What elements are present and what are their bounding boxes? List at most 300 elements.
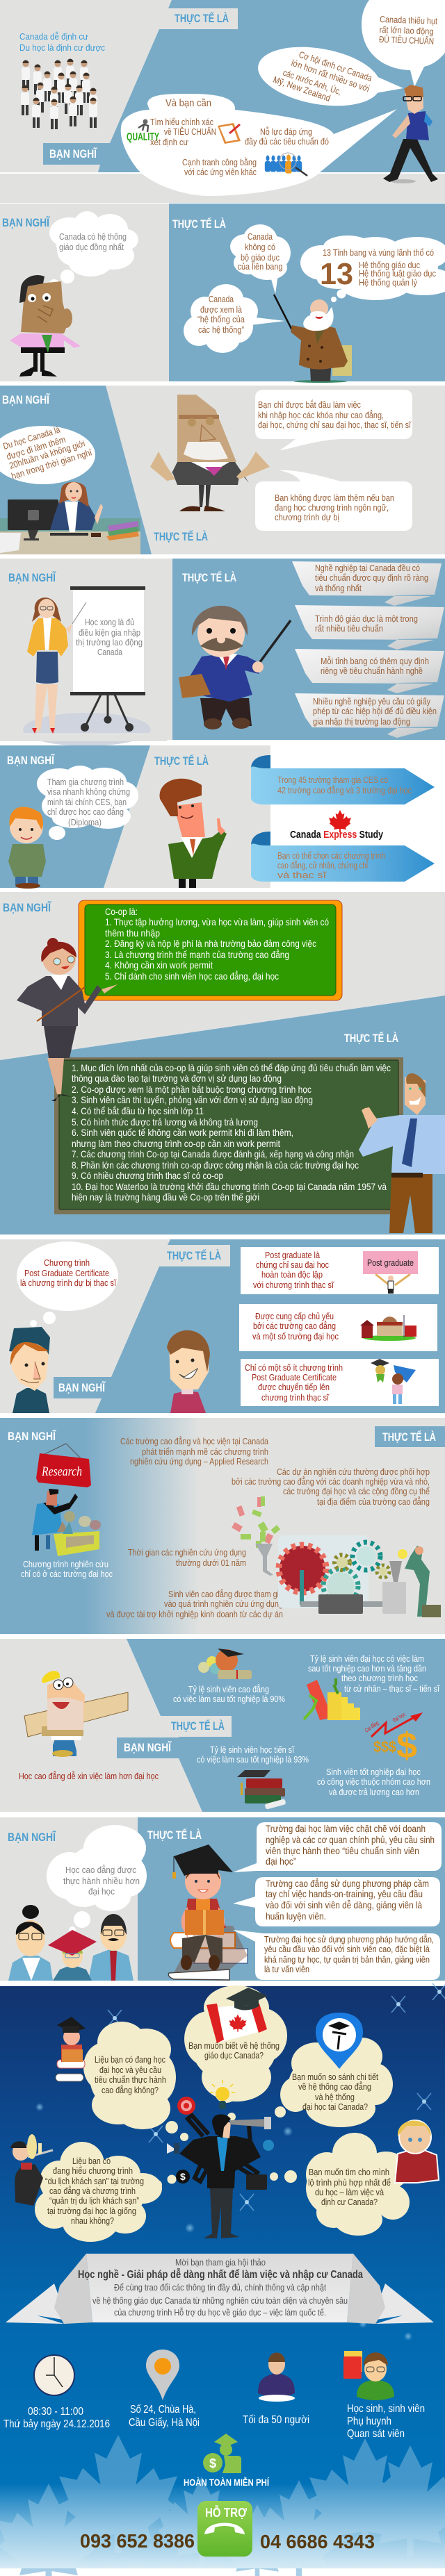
text: thời gian nghiên cứu: thường dưới 01 năm [176, 1558, 246, 1568]
illustration: professor with pointer [274, 295, 352, 383]
heading: bạn nghĩ: BẠN NGHĨ [2, 393, 50, 406]
heading: bạn nghĩ: BẠN NGHĨ [58, 1380, 106, 1394]
thought cloud: CES: (Diploma) [68, 817, 102, 827]
icon: student with books [343, 2351, 394, 2400]
green board: co-op là: 4. Không cần xin work permit [105, 959, 213, 971]
text: đại học tăng dần: Tỷ lệ sinh viên đại học có việc làm [310, 1653, 424, 1664]
heading: thực tế là: THỰC TẾ LÀ [147, 1828, 202, 1842]
box: chuyển tiếp thạc sĩ [241, 1359, 439, 1406]
ribbon: 45 trường CES: Trong 45 trường tham gia CES có [277, 775, 388, 785]
text: tìm hiểu tiêu chuẩn: xét định cư [150, 137, 188, 147]
speech bubble: phương pháp hướng dẫn: là tư vấn viên [264, 1964, 309, 1974]
heading: bạn nghĩ: BẠN NGHĨ [8, 570, 56, 584]
icon: light bulb [210, 2080, 235, 2109]
icon: student on books [56, 2017, 86, 2081]
text: dự án phối hợp [232, 1467, 430, 1507]
icon: rising arrow and dollars: Đại học [392, 1711, 406, 1724]
text: và bạn cần: Và bạn cần [165, 97, 211, 109]
text: tiến sĩ 93%: có việc làm sau tốt nghiệp là 93% [197, 1754, 309, 1765]
text: hotline [80, 2530, 375, 2552]
box: post graduate độc lập [241, 1247, 439, 1294]
box: chuyển tiếp thạc sĩ: Chỉ có một số ít chương trình [245, 1362, 343, 1373]
speech bubble: không có bộ giáo dục: Canada [248, 231, 273, 242]
panel: section 4 gia nhập thị trường lao động [0, 559, 445, 746]
banner: hội thảo [6, 2254, 434, 2324]
text: cao đẳng 90%: có việc làm sau tốt nghiệp là 90% [173, 1694, 285, 1704]
box: post graduate độc lập: với chương trình thạc sĩ [253, 1280, 334, 1290]
ribbon: 45 trường CES [251, 755, 435, 804]
text: tiến sĩ 93% [197, 1744, 309, 1765]
speech bubble: cơ hội định cư: các nước Anh, Úc, [282, 67, 343, 97]
heading: bạn nghĩ: BẠN NGHĨ [7, 753, 55, 767]
ribbon: mỗi tỉnh bang: Mỗi tỉnh bang có thêm quy định [321, 656, 429, 666]
heading: thực tế là: THỰC TẾ LÀ [154, 530, 208, 543]
speech bubble: bắt đầu làm việc: đại học, chứng chỉ sau đại học, thạc sĩ, tiến sĩ [258, 420, 412, 430]
icon: MBA graduate [371, 1359, 416, 1404]
flipchart with text: Canada [97, 647, 123, 657]
box: cao đẳng cung cấp: bởi các trường cao đẳng [253, 1321, 336, 1331]
heading: bạn nghĩ [117, 1737, 179, 1758]
flipchart with text [70, 586, 145, 732]
icon: research sign: Research [41, 1464, 82, 1479]
speech bubble: không được làm thêm: chương trình dự bị [275, 512, 339, 522]
text: cạnh tranh công bằng: với các ứng viên khác [184, 167, 257, 177]
text: tiến sĩ 93%: Tỷ lệ sinh viên học tiến sĩ [210, 1744, 295, 1755]
illustration: professor in navy jacket [179, 606, 291, 729]
thought cloud: đang học đại học: Liệu bạn có đang học [95, 2054, 165, 2065]
box: cao đẳng cung cấp [239, 1304, 437, 1351]
icon: free tuition: $ [209, 2457, 216, 2470]
thought cloud: 13 tỉnh bang: 13 [320, 257, 353, 291]
speech bubble: du học được đi làm thêm: được đi làm thêm [5, 434, 67, 462]
icon: post graduate sign: Post graduate [367, 1257, 414, 1268]
dark board: thực tế co-op: 5. Có hình thức được trả lương và không trả lương [72, 1116, 258, 1128]
icon: free tuition [203, 2434, 241, 2473]
text: mô tả hội thảo: của chương trình Hỗ trợ du học về giáo dục – việc làm quốc tế. [114, 2307, 326, 2318]
thought cloud: post graduate [17, 1241, 118, 1327]
text: đối tượng: Học sinh, sinh viên [347, 2403, 425, 2415]
box: chuyển tiếp thạc sĩ: được chuyển tiếp lên [258, 1382, 330, 1392]
speech bubble: du học được đi làm thêm [0, 424, 95, 484]
thought cloud: hệ thống giáo dục canada [184, 1985, 287, 2103]
illustration: shrugging man in suit [150, 395, 270, 511]
dark board: thực tế co-op: 10. Đại học Waterloo là trường khởi đầu chương trình Co-op tại Canada năm 1957 và [72, 1181, 387, 1192]
dark board: thực tế co-op: 7. Các chương trình Co-op tại Canada được đánh giá, xếp hạng và công nhận [72, 1148, 354, 1159]
logo: Canada Express Study: Canada Express Study [290, 829, 384, 841]
speech bubble: hệ thống của các hệ thống [184, 284, 285, 353]
ribbon: giấy phép hiệp hội [295, 693, 444, 738]
text: cao đẳng dễ xin việc: Học cao đẳng dễ xin việc làm hơn đại học [19, 1771, 159, 1781]
thought cloud: 13 tỉnh bang: Hệ thống giáo dục [359, 260, 420, 270]
thought cloud: post graduate: Post Graduate Certificate [24, 1268, 109, 1278]
illustration: thinking man [10, 275, 81, 377]
thought cloud: hệ thống giáo dục canada: giáo dục Canada? [204, 2050, 264, 2061]
text: applied research [120, 1436, 269, 1467]
thought cloud: đang học đại học: cao đẳng không? [102, 2085, 159, 2095]
speech bubble: hệ thống của các hệ thống: “hệ thống của [197, 314, 245, 324]
heading: thực tế là: THỰC TẾ LÀ [171, 1719, 225, 1733]
heading: bạn nghĩ: BẠN NGHĨ [3, 900, 51, 914]
thought cloud: 13 tỉnh bang [300, 236, 445, 302]
thought cloud: CES: visa nhanh không chứng [47, 786, 130, 797]
thought cloud: du lịch khách sạn: Liệu bạn có [72, 2156, 111, 2166]
panel: section 5 CES [0, 745, 445, 889]
thought cloud: so sánh cao đẳng đại học: đại học tại Canada? [302, 2102, 368, 2112]
flipchart with text: Học xong là đủ [85, 617, 134, 627]
flipchart with text: thị trường lao động [76, 637, 143, 647]
speech bubble: không được làm thêm [255, 470, 412, 531]
icon: graduation balls [198, 1649, 252, 1679]
green board: co-op là: 5. Chỉ dành cho sinh viên học cao đẳng, đại học [105, 970, 279, 982]
panel: section 9 việc làm [0, 1639, 445, 1812]
ribbon: nghề nghiệp có tiêu chuẩn: và thống nhất [315, 583, 362, 593]
text: lương cao hơn: và được trả lương cao hơn [329, 1787, 419, 1797]
thought cloud: CES: Tham gia chương trình [47, 777, 124, 787]
box: cao đẳng cung cấp: và một số trường đại học [252, 1331, 339, 1341]
ribbon: chương trình: Bạn có thể chọn các chương trình [277, 850, 385, 861]
green board: co-op là: 2. Đăng ký và nộp lệ phí là nhà trường bảo đảm công việc [105, 938, 316, 949]
ribbon: mỗi tỉnh bang: riêng về tiêu chuẩn hành nghề [321, 666, 423, 676]
text: nỗ lực đáp ứng [245, 126, 329, 147]
speech bubble: và bạn cần [121, 94, 397, 196]
panel: section 7 post graduate [0, 1239, 445, 1413]
icon: walking man with glasses [383, 85, 438, 183]
heading: thực tế là: THỰC TẾ LÀ [167, 1249, 221, 1262]
dark board: thực tế co-op: 1. Mục đích lớn nhất của co-op là giúp sinh viên có thể đáp ứng đủ tiêu chuẩn làm việc [72, 1062, 391, 1073]
text: nghiên cứu chỉ ở đại học: chỉ có ở các trường đại học [21, 1569, 113, 1579]
thought cloud: CES: minh tài chính CES, bạn [47, 797, 127, 807]
thought cloud: đang học đại học: tiêu chuẩn thực hành [95, 2074, 166, 2085]
text: tìm hiểu tiêu chuẩn [150, 117, 216, 147]
icon: college [360, 1315, 416, 1341]
text: mô tả hội thảo [92, 2282, 348, 2318]
speech bubble: không được làm thêm: đang học chương trình ngôn ngữ, [275, 502, 389, 513]
icon: bar chart [304, 1678, 360, 1720]
icon: map pin graduate [316, 2013, 363, 2069]
text: mô tả hội thảo: Để cùng trao đổi các thông tin đầy đủ, chính thống và cập nhật [114, 2282, 326, 2293]
box: post graduate độc lập: Post graduate là [265, 1250, 321, 1260]
icon: canada flag and grad cap [207, 1988, 268, 2043]
thought cloud: du lịch khách sạn: đang hiểu chương trình [53, 2165, 133, 2176]
thought cloud: 13 tỉnh bang: Hệ thống quản lý [359, 277, 417, 288]
icon: stacked books [237, 1770, 286, 1810]
icon: rising arrow and dollars: $$$ [373, 1738, 396, 1756]
text: sinh viên tham gia: Sinh viên cao đẳng được tham gia [168, 1589, 284, 1599]
thought cloud: CES: chỉ được học cao đẳng [47, 807, 124, 817]
illustration: woman at desk [0, 482, 140, 554]
text: mời tham gia: Mời bạn tham gia hội thảo [175, 2257, 266, 2268]
thought cloud: so sánh cao đẳng đại học: Bạn muốn so sánh chi tiết [292, 2072, 378, 2082]
dark board: thực tế co-op: hiện nay là trường hàng đầu về Co-op trên thế giới [72, 1191, 259, 1203]
thought cloud: du lịch khách sạn: “du lịch khách sạn” tại trường [45, 2176, 144, 2186]
text: thời gian nghiên cứu: Thời gian các nghiên cứu ứng dụng [128, 1547, 246, 1558]
box: post graduate độc lập: chứng chỉ sau đại học [256, 1260, 329, 1270]
speech bubble: du học được đi làm thêm: 20h/tuần và không giới [8, 438, 86, 471]
text: Canada dễ định cư [19, 31, 105, 53]
button: hỗ trợ: HỖ TRỢ [205, 2505, 248, 2520]
panel: section 2 hệ thống giáo dục [0, 204, 445, 383]
box: chuyển tiếp thạc sĩ: Post Graduate Certificate [252, 1372, 337, 1382]
illustration: teacher with pointer [17, 938, 118, 1101]
speech bubble: cơ hội định cư: Mỹ, New Zealand [272, 74, 332, 104]
ribbon: nghề nghiệp có tiêu chuẩn [292, 561, 442, 606]
thought cloud: du lịch khách sạn: tại trường đại học là giống [47, 2206, 136, 2216]
speech bubble: không có bộ giáo dục: không có [245, 242, 275, 252]
speech bubble: thiếu hụt lao động [362, 0, 445, 87]
illustration: man in green suit [160, 779, 227, 888]
text: nỗ lực đáp ứng: đầy đủ các tiêu chuẩn đó [245, 136, 329, 147]
white panel with ribbons [251, 745, 445, 888]
thought cloud: lộ trình phù hợp: định cư Canada? [321, 2197, 378, 2207]
text: nghiên cứu chỉ ở đại học [21, 1559, 113, 1579]
text: thời gian: Thứ bảy ngày 24.12.2016 [3, 2418, 110, 2430]
panel: section 8 nghiên cứu [0, 1418, 445, 1634]
dark board: thực tế co-op: 8. Phần lớn các chương trình co-op được công nhận là của các trường đại học [72, 1159, 359, 1171]
thought cloud: đang học đại học [83, 2022, 195, 2150]
green board: co-op là: 1. Thực tập hưởng lương, vừa học vừa làm, giúp sinh viên có [105, 916, 329, 927]
ribbon: nghề nghiệp có tiêu chuẩn: Nghề nghiệp tại Canada đều có [315, 563, 420, 573]
illustration: builder with plank [24, 1671, 128, 1757]
thought cloud: so sánh cao đẳng đại học: về hệ thống cao đẳng [298, 2081, 371, 2092]
thought cloud: post graduate: là chương trình dự bị thạc sĩ [20, 1278, 117, 1288]
icon: quality [127, 119, 159, 143]
text: cạnh tranh công bằng: Cạnh tranh công bằng [182, 157, 257, 167]
dark board: thực tế co-op: 3. Sinh viên cần thi tuyển, phỏng vấn với đơn vị sử dụng lao động [72, 1094, 313, 1105]
icon: crowd of people [21, 58, 97, 129]
panel: section 3 đi làm thêm [0, 386, 445, 554]
illustration: multitasking businessman: $ [180, 2171, 186, 2182]
speech bubble: bắt đầu làm việc [255, 390, 412, 450]
thought cloud: du lịch khách sạn: nhau không? [71, 2215, 114, 2226]
heading: bạn nghĩ: BẠN NGHĨ [124, 1740, 172, 1754]
icon: rising arrow and dollars [364, 1711, 423, 1766]
speech bubble: du học được đi làm thêm: Du học Canada là [1, 424, 62, 452]
speech bubble: bắt đầu làm việc: Bạn chỉ được bắt đầu làm việc [258, 399, 361, 410]
illustration: man in light blue shirt [359, 1073, 445, 1233]
icon: clock [34, 2355, 74, 2395]
thought cloud: so sánh cao đẳng đại học [227, 2038, 393, 2127]
icon: checklist [218, 123, 241, 144]
thought cloud: lộ trình phù hợp: lộ trình phù hợp nhất để [308, 2177, 391, 2188]
text: hotline: 04 6686 4343 [260, 2531, 375, 2552]
thought cloud: thực hành nhiều hơn: Học cao đẳng được [65, 1865, 136, 1875]
thought cloud: đồng nhất: giáo dục đồng nhất [59, 242, 124, 252]
speech bubble: cơ hội định cư: lớn hơn rất nhiều so với [290, 58, 371, 94]
panel: section 6 co-op [0, 892, 445, 1235]
text: đối tượng [347, 2403, 425, 2440]
thought cloud: du lịch khách sạn [35, 2142, 177, 2242]
icon: people and magnifier [265, 153, 307, 176]
heading: bạn nghĩ: BẠN NGHĨ [2, 215, 50, 229]
ribbon: 45 trường CES: 42 trường cao đẳng và 3 trường đại học [277, 785, 412, 795]
text: miễn phí: HOÀN TOÀN MIỄN PHÍ [184, 2477, 270, 2488]
heading: thực tế là: THỰC TẾ LÀ [154, 754, 209, 768]
text: hotline: 093 652 8386 [80, 2530, 195, 2552]
text: thời gian: 08:30 - 11:00 [28, 2406, 83, 2418]
thought cloud: post graduate: Chương trình [44, 1257, 90, 1268]
thought cloud: thực hành nhiều hơn [47, 1825, 147, 1933]
button: hỗ trợ [197, 2501, 252, 2557]
text: thời gian nghiên cứu [128, 1547, 246, 1568]
heading: thực tế là: THỰC TẾ LÀ [344, 1032, 398, 1045]
heading: bạn nghĩ: BẠN NGHĨ [49, 147, 97, 160]
illustration: boy with cap [9, 1327, 50, 1413]
text: đại học tăng dần [308, 1653, 440, 1694]
text: địa điểm [129, 2404, 200, 2429]
text: lương cao hơn [317, 1767, 430, 1797]
speech bubble: đại học thực hành [233, 1822, 442, 1872]
heading: thực tế là: THỰC TẾ LÀ [172, 217, 226, 231]
box: cao đẳng cung cấp: Được cung cấp chủ yếu [255, 1311, 334, 1321]
speech bubble: cơ hội định cư: Cơ hội định cư Canada [298, 49, 374, 83]
thought cloud: lộ trình phù hợp: Bạn muốn tìm cho mình [309, 2167, 389, 2177]
dark board: thực tế co-op: 9. Có nhiều chương trình thạc sĩ có co-op [72, 1170, 223, 1181]
icon: post graduate sign [363, 1251, 418, 1294]
speech bubble: thiếu hụt lao động: rất lớn lao động [379, 24, 434, 37]
icon: rising arrow and dollars: $ [396, 1726, 417, 1766]
ribbon: chương trình: cao đẳng, cử nhân, chứng chỉ [277, 860, 368, 870]
ribbon: nghề nghiệp có tiêu chuẩn: tiêu chuẩn được quy định rõ ràng [315, 572, 428, 583]
icon: blond boy in red [395, 2120, 439, 2183]
text: đại học tăng dần: theo chương trình học [341, 1673, 418, 1683]
text: Canada dễ định cư: Canada dễ định cư [19, 31, 88, 42]
illustration: smiling man [167, 1330, 210, 1413]
text: applied research: nghiên cứu ứng dụng – Applied Research [130, 1456, 268, 1467]
text: số người: Tối đa 50 người [243, 2414, 309, 2426]
ribbon: chương trình: và thạc sĩ [277, 870, 327, 880]
text: cao đẳng 90% [173, 1684, 285, 1704]
text: applied research: Các trường cao đẳng và học viện tại Canada [120, 1436, 269, 1446]
heading: thực tế là [375, 1426, 445, 1447]
speech bubble: đại học thực hành: viên thực hành theo “tiêu chuẩn sinh viên [266, 1845, 419, 1856]
text: cao đẳng 90%: Tỷ lệ sinh viên cao đẳng [188, 1684, 269, 1694]
green board: co-op là [79, 900, 342, 1000]
green board: co-op là: thêm thu nhập [105, 927, 160, 939]
speech bubble: không được làm thêm: Bạn không được làm thêm nếu bạn [275, 493, 394, 503]
text: Canada dễ định cư: Du học là định cư được [19, 42, 105, 53]
heading: thực tế là [167, 1245, 230, 1266]
text: nỗ lực đáp ứng: Nỗ lực đáp ứng [260, 126, 312, 137]
text: sinh viên tham gia: và được tài trợ khởi nghiệp kinh doanh từ các dự án [106, 1609, 283, 1619]
text: sinh viên tham gia: vào quá trình nghiên cứu ứng dụng [164, 1599, 283, 1609]
speech bubble: hệ thống của các hệ thống: các hệ thống” [198, 324, 244, 335]
panel: section 10 thực hành [0, 1817, 445, 1981]
text: đối tượng: Phụ huynh [347, 2416, 391, 2427]
speech bubble: cơ hội định cư [253, 38, 403, 115]
dark board: thực tế co-op: thông qua đào tạo tại trường và đơn vị sử dụng lao động [72, 1073, 282, 1084]
thought cloud: thực hành nhiều hơn: đại học [88, 1886, 115, 1897]
box: chuyển tiếp thạc sĩ: chương trình thạc sĩ [261, 1392, 330, 1403]
thought cloud: du lịch khách sạn: cao đẳng và chương trình [49, 2186, 136, 2196]
icon: research sign [36, 1444, 91, 1487]
text: nghiên cứu chỉ ở đại học: Chương trình nghiên cứu [23, 1559, 108, 1569]
speech bubble: đại học thực hành: đại học” [266, 1856, 296, 1867]
text: đối tượng: Quan sát viên [347, 2428, 405, 2440]
text: tìm hiểu tiêu chuẩn: Tìm hiểu chính xác [150, 117, 213, 127]
ribbon: trình độ giáo dục [295, 605, 444, 650]
thought cloud: hệ thống giáo dục canada: Bạn muốn biết về hệ thống [188, 2040, 280, 2051]
ribbon: trình độ giáo dục: rất nhiều tiêu chuẩn [315, 623, 383, 634]
speech bubble: hệ thống của các hệ thống: được xem là [200, 304, 243, 315]
speech bubble: không có bộ giáo dục [230, 224, 291, 294]
text: địa điểm: Cầu Giấy, Hà Nội [129, 2417, 200, 2429]
logo: Canada Express Study [290, 810, 384, 841]
thought cloud: lộ trình phù hợp: du học – làm việc và [315, 2187, 385, 2197]
heading: thực tế là: THỰC TẾ LÀ [175, 12, 229, 25]
illustration: scientist at lab table [32, 1489, 101, 1556]
icon: quality: QUALITY [127, 131, 159, 143]
green board: co-op là: Co-op là: [105, 906, 138, 917]
ribbon: trình độ giáo dục: Trình độ giáo dục là một trong [315, 613, 418, 624]
heading: bạn nghĩ [54, 1377, 111, 1398]
thought cloud: đang học đại học: đại học và yêu cầu [99, 2065, 161, 2075]
panel: section 11 hội thảo [0, 1983, 445, 2576]
icon: rising arrow and dollars: Cao đẳng [364, 1720, 380, 1734]
heading: bạn nghĩ [43, 143, 110, 165]
heading: thực tế là: THỰC TẾ LÀ [182, 571, 236, 584]
dark board: thực tế co-op [54, 1057, 403, 1214]
background: maple leaves [0, 2435, 445, 2576]
speech bubble: cầm tay chỉ việc [233, 1877, 440, 1926]
ribbon: giấy phép hiệp hội: gia nhập thị trường lao động [313, 716, 410, 727]
ribbon: mỗi tỉnh bang [295, 649, 444, 693]
icon: person [258, 2352, 295, 2402]
thought cloud: CES [37, 766, 138, 840]
speech bubble: bắt đầu làm việc: khi nhập học các khóa như cao đẳng, [258, 410, 384, 420]
illustration: woman with pointer [27, 597, 86, 734]
thought cloud: đồng nhất [49, 211, 138, 289]
speech bubble: không có bộ giáo dục: bộ giáo dục [241, 252, 280, 263]
text: tìm hiểu tiêu chuẩn: về TIÊU CHUẨN [164, 126, 216, 137]
ribbon: chương trình [251, 832, 435, 882]
text: sinh viên tham gia [106, 1589, 284, 1619]
illustration: money machine with gears [232, 1496, 441, 1617]
text: lương cao hơn: Sinh viên tốt nghiệp đại học [326, 1767, 421, 1777]
icon: waiter [10, 2134, 53, 2206]
dark board: thực tế co-op: 6. Sinh viên quốc tế không cần work permit khi đi làm thêm, [72, 1127, 293, 1138]
speech bubble: hệ thống của các hệ thống: Canada [209, 294, 234, 304]
icon: silver pin [146, 2350, 179, 2400]
illustration: student reading on books [168, 1844, 248, 1980]
illustration: three people [8, 1905, 134, 1981]
flipchart with text: điều kiện gia nhập [79, 627, 140, 638]
speech bubble: phương pháp hướng dẫn [233, 1930, 440, 1980]
heading: thực tế là [168, 8, 238, 29]
dark board: thực tế co-op: 2. Co-op được xem là một phần bắt buộc trong chương trình học [72, 1084, 312, 1095]
green board: co-op là: 3. Là chương trình thế mạnh của trường cao đẳng [105, 948, 289, 960]
heading: bạn nghĩ: BẠN NGHĨ [8, 1830, 56, 1844]
illustration: multitasking businessman [167, 2097, 274, 2238]
text: applied research: phát triển mạnh mẽ các chương trình [142, 1446, 268, 1457]
thought cloud: đồng nhất: Canada có hệ thống [59, 231, 127, 242]
text: cạnh tranh công bằng [182, 157, 257, 177]
thought cloud: du lịch khách sạn: “quản trị du lịch khách sạn” [49, 2195, 139, 2206]
heading: thực tế là [161, 1716, 232, 1737]
speech bubble: du học được đi làm thêm: hạn trong thời gian nghỉ [10, 447, 93, 481]
title: học nghề: Học nghề - Giải pháp dễ dàng nhất để làm việc và nhập cư Canada [78, 2268, 363, 2281]
speech bubble: cầm tay chỉ việc: huấn luyện viên. [266, 1910, 326, 1922]
text: địa điểm: Số 24, Chùa Hà, [130, 2404, 196, 2416]
illustration: boy with orange hair [8, 807, 46, 889]
dark board: thực tế co-op: nhưng làm theo chương trình co-op cần xin work permit [72, 1138, 280, 1149]
speech bubble: không có bộ giáo dục: của liên bang [238, 261, 282, 272]
thought cloud: so sánh cao đẳng đại học: và hệ thống [315, 2092, 355, 2102]
heading: bạn nghĩ: BẠN NGHĨ [8, 1429, 56, 1443]
dark board: thực tế co-op: 4. Có thể bắt đầu từ học sinh lớp 11 [72, 1105, 204, 1116]
text: thời gian [3, 2406, 110, 2430]
box: post graduate độc lập: hoàn toàn độc lập [261, 1269, 323, 1280]
thought cloud: thực hành nhiều hơn: thực hành nhiều hơn [63, 1876, 140, 1886]
